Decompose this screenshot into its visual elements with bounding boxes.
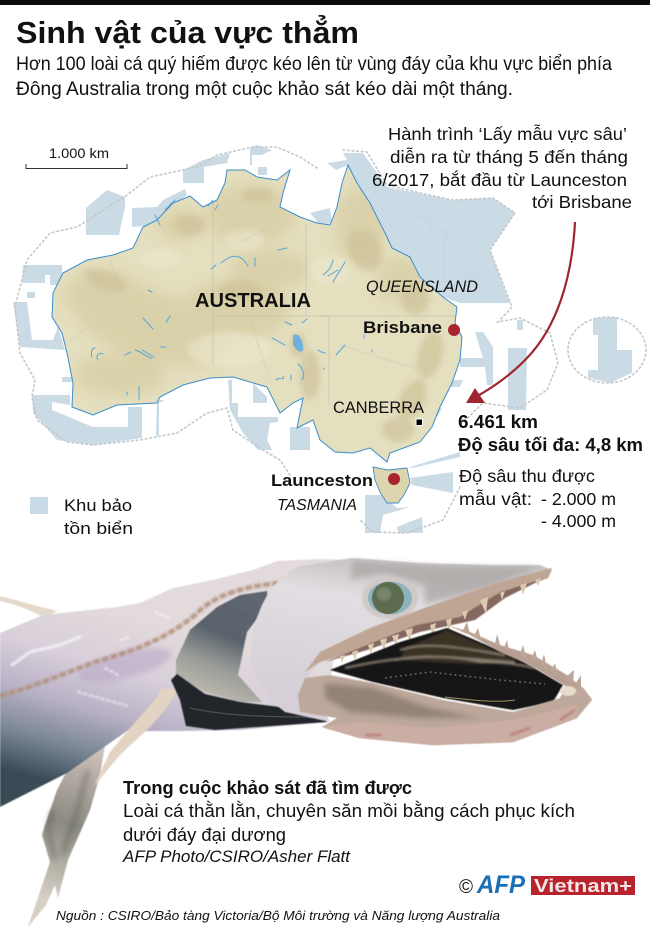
depth figures: Độ sâu tối đa: 4,8 km — [458, 434, 643, 455]
tail fin — [28, 745, 105, 927]
route description: Hành trình ‘Lấy mẫu vực sâu’ — [388, 123, 627, 144]
highlights on skin — [12, 612, 170, 706]
black gill band — [171, 674, 327, 730]
marine zone inner lines — [417, 217, 495, 285]
depth figures — [458, 411, 643, 531]
route description: tới Brisbane — [532, 192, 632, 212]
photo: lizardfish — [0, 558, 592, 927]
upper teeth — [340, 578, 541, 663]
depth figures: - 4.000 m — [541, 511, 616, 531]
depth figures: mẫu vật: — [459, 488, 532, 509]
source line: Nguồn : CSIRO/Bảo tàng Victoria/Bộ Môi trường và Năng lượng Australia — [56, 908, 500, 923]
depth figures: - 2.000 m — [541, 489, 616, 509]
title: Sinh vật của vực thẳm — [16, 14, 359, 50]
legend: marine reserve: Khu bảo — [64, 496, 132, 515]
terrain relief — [63, 185, 457, 442]
body — [0, 559, 353, 807]
mouth interior — [330, 628, 563, 710]
upper snout shading — [350, 561, 540, 604]
marker Launceston: Launceston — [271, 471, 373, 490]
route description: 6/2017, bắt đầu từ Launceston — [372, 169, 627, 190]
logos: AFP and Vietnam+ — [459, 871, 635, 899]
lower jaw gum with teeth — [447, 625, 592, 700]
jaw tip — [560, 686, 576, 696]
intro text: Hơn 100 loài cá quý hiếm được kéo lên từ vùng đáy của khu vực biển phía — [16, 54, 612, 75]
route description: diễn ra từ tháng 5 đến tháng — [390, 146, 628, 167]
marine protected areas — [13, 145, 632, 533]
marker Brisbane: Brisbane — [363, 318, 442, 337]
dotted boundary of exclusive zone — [15, 147, 646, 533]
label Tasmania: TASMANIA — [277, 497, 357, 514]
caption: Trong cuộc khảo sát đã tìm được — [123, 777, 412, 798]
marker Canberra: CANBERRA — [333, 398, 425, 417]
lateral line — [0, 582, 290, 696]
pectoral fin — [94, 688, 178, 786]
legend: marine reserve: tồn biển — [64, 519, 133, 538]
dorsal fin strand — [0, 596, 57, 618]
rivers and lakes — [91, 200, 372, 400]
gill cover — [176, 591, 268, 702]
head — [250, 558, 552, 722]
intro text: Đông Australia trong một cuộc khảo sát kéo dài một tháng. — [16, 79, 513, 100]
depth figures: Độ sâu thu được — [459, 466, 595, 486]
scale bar: 1.000 km — [49, 145, 109, 161]
upper jaw band — [305, 568, 552, 672]
logos: AFP and Vietnam+: Vietnam+ — [534, 876, 632, 896]
top black bar — [0, 0, 650, 5]
caption: dưới đáy đại dương — [123, 824, 286, 845]
eye — [362, 577, 418, 619]
Tasmania — [373, 467, 410, 503]
state borders — [213, 195, 457, 405]
arrow: route to depth data — [466, 222, 575, 403]
lower jaw — [298, 675, 592, 745]
scale bar — [26, 145, 127, 168]
route description — [372, 123, 632, 212]
Lake Eyre — [293, 334, 303, 352]
legend: marine reserve — [30, 496, 133, 538]
caption: Loài cá thằn lằn, chuyên săn mồi bằng cách phục kích — [123, 800, 575, 821]
logos: AFP and Vietnam+: © — [459, 877, 473, 898]
intro text — [16, 54, 612, 100]
coastline — [52, 165, 462, 462]
label Australia: AUSTRALIA — [195, 290, 311, 312]
map of Australia — [13, 145, 646, 533]
caption: AFP Photo/CSIRO/Asher Flatt — [122, 847, 351, 866]
body colour patches — [75, 641, 175, 689]
caption — [122, 777, 575, 866]
land mass — [52, 165, 462, 462]
marker Canberra — [333, 398, 425, 426]
depth figures: 6.461 km — [458, 411, 538, 432]
label Queensland: QUEENSLAND — [366, 277, 478, 296]
logos: AFP and Vietnam+: AFP — [476, 871, 525, 899]
